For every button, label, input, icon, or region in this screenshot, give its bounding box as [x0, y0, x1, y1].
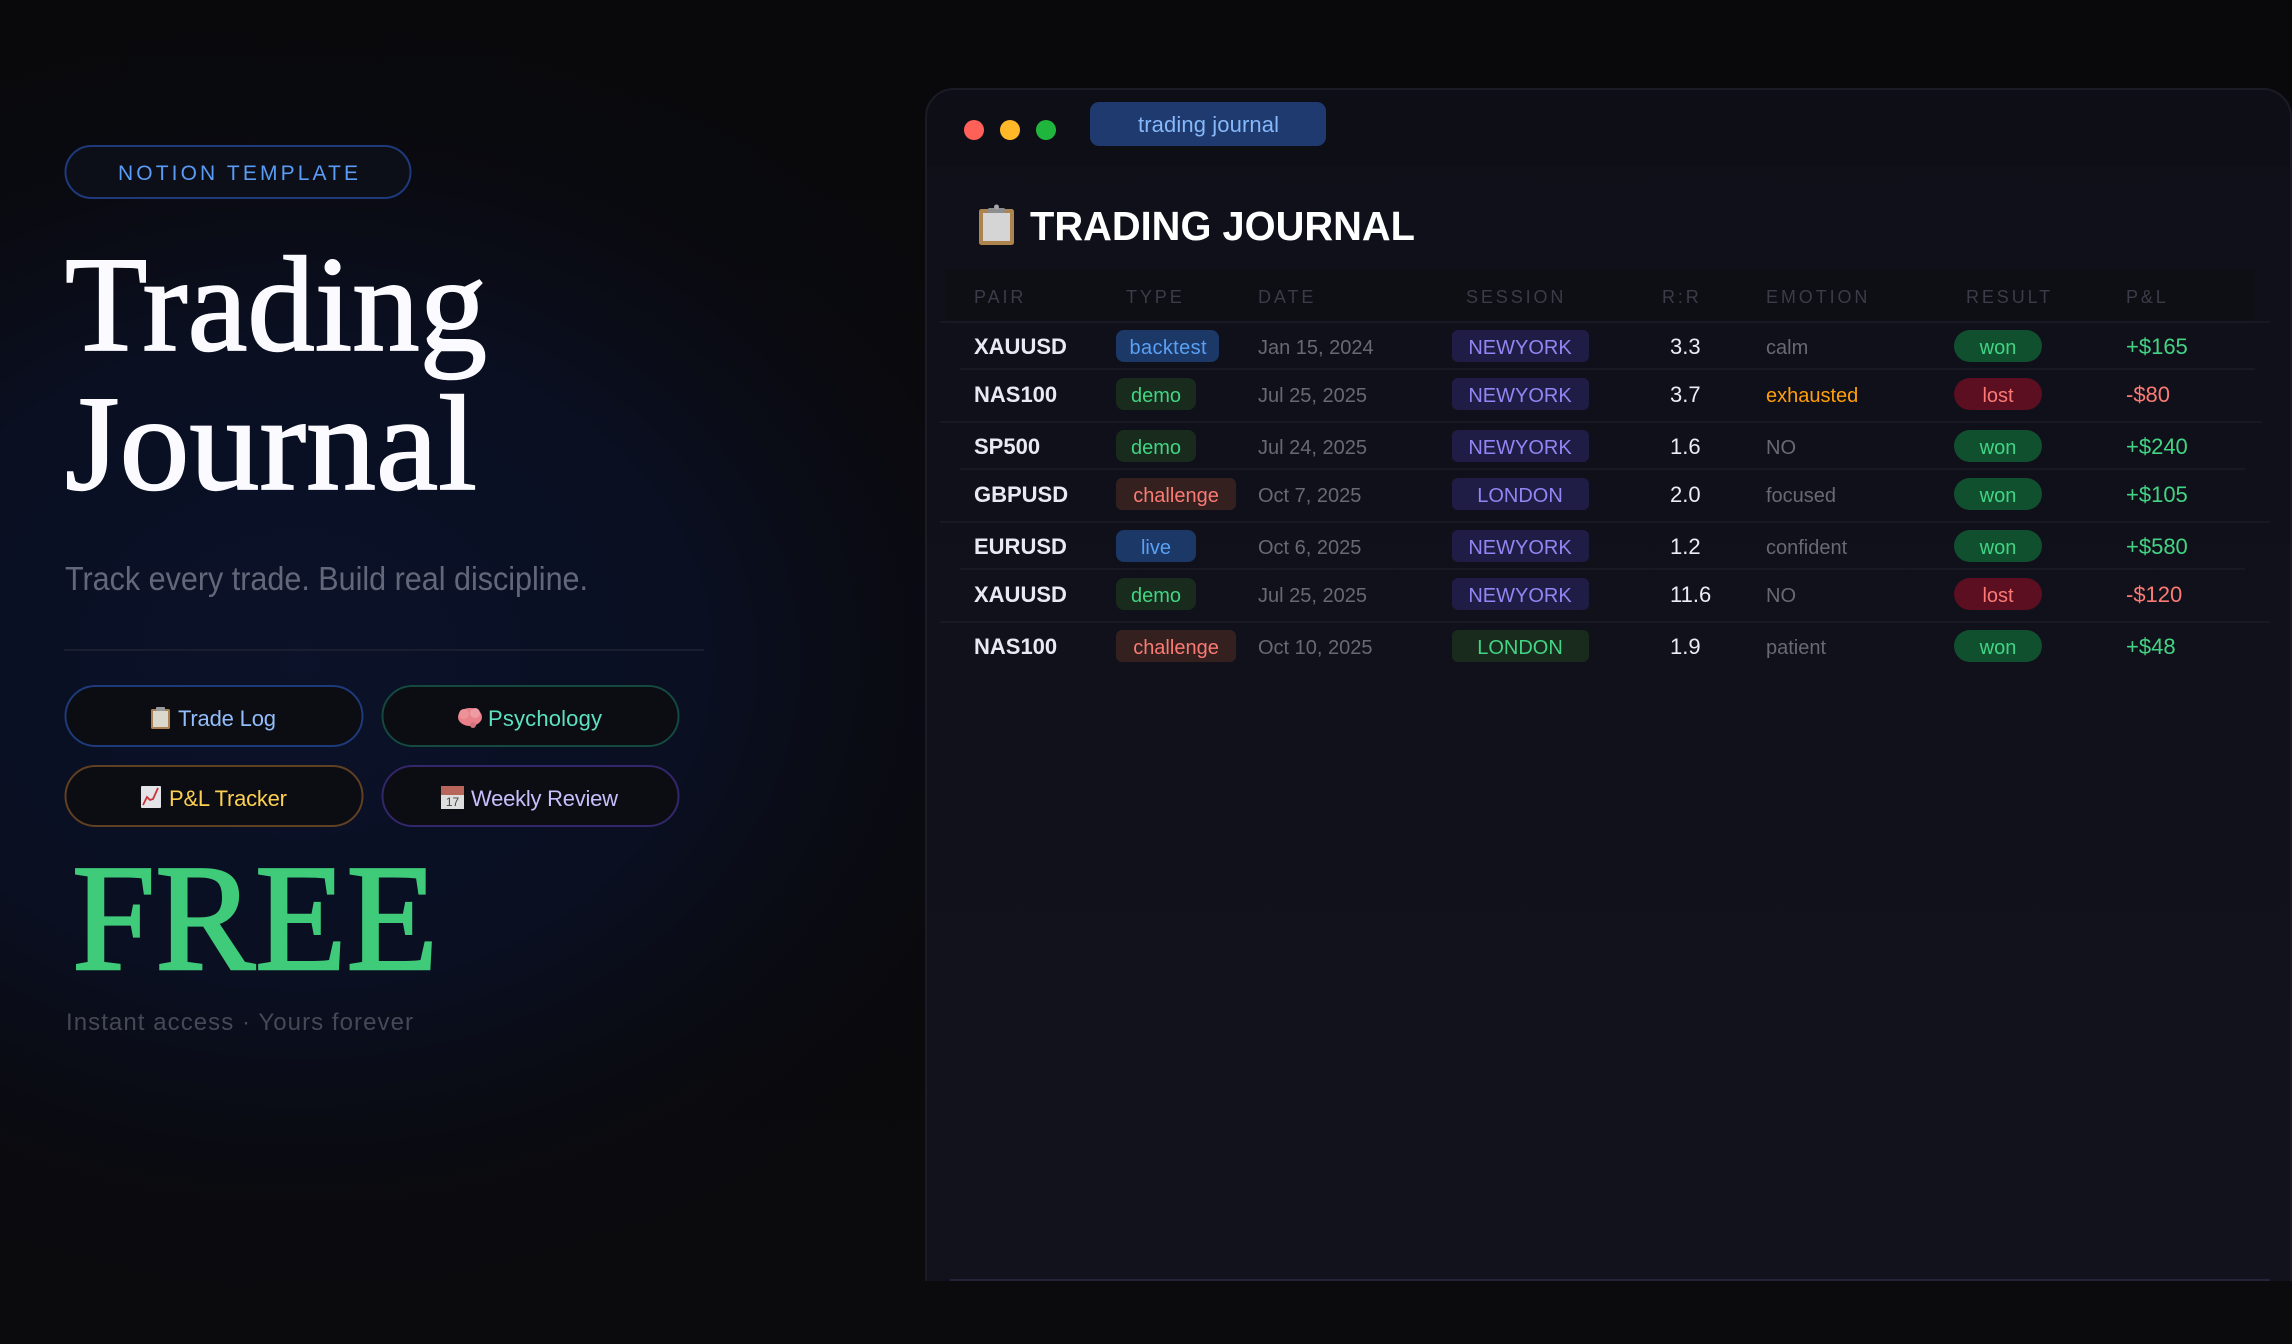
row 6: Jul 25, 2025 — [1258, 585, 1367, 607]
row 1: XAUUSD — [974, 334, 1067, 359]
row 6: lost — [1982, 585, 2014, 607]
badge: notion template: NOTION TEMPLATE — [118, 162, 358, 185]
row 7 — [974, 630, 2176, 662]
badge: notion template — [66, 146, 410, 198]
table heading: TRADING JOURNAL — [1030, 203, 1415, 249]
bottom edge — [950, 1279, 2270, 1281]
row 3: Jul 24, 2025 — [1258, 437, 1367, 459]
row 3: SP500 — [974, 434, 1040, 459]
row 1: 3.3 — [1670, 334, 1701, 359]
panel: app window — [926, 89, 2291, 1281]
row 2 — [974, 378, 2170, 410]
row 7: LONDON — [1477, 637, 1563, 659]
row 6: XAUUSD — [974, 582, 1067, 607]
feature pill: trade log: Trade Log — [178, 706, 276, 731]
feature pill: trade log — [66, 686, 362, 746]
title: Journal — [65, 369, 477, 519]
table header: PAIR — [974, 287, 1026, 307]
row 5 — [974, 530, 2188, 562]
divider — [64, 649, 704, 651]
row 1: +$165 — [2126, 334, 2188, 359]
table header: SESSION — [1466, 287, 1566, 307]
row 3: NEWYORK — [1468, 437, 1572, 459]
row 4: Oct 7, 2025 — [1258, 485, 1361, 507]
row 2: demo — [1131, 385, 1181, 407]
table header — [946, 270, 2255, 322]
row 4 — [974, 478, 2188, 510]
row 5: EURUSD — [974, 534, 1067, 559]
tab: trading journal — [1138, 112, 1279, 137]
feature pill: p&l tracker — [66, 766, 362, 826]
row 3 — [974, 430, 2188, 462]
row 1 — [974, 330, 2188, 362]
title bar — [926, 89, 2291, 167]
icon: brain — [458, 708, 482, 728]
row 4: GBPUSD — [974, 482, 1068, 507]
row 7: challenge — [1133, 637, 1219, 659]
row 7: NAS100 — [974, 634, 1057, 659]
feature pill: psychology — [382, 686, 678, 746]
row 4: +$105 — [2126, 482, 2188, 507]
row 7: +$48 — [2126, 634, 2176, 659]
row 2: Jul 25, 2025 — [1258, 385, 1367, 407]
table header: P&L — [2126, 287, 2169, 307]
table: trades — [940, 270, 2270, 662]
panel: left hero column — [64, 146, 704, 1036]
row 3: NO — [1766, 437, 1796, 459]
row 6: NEWYORK — [1468, 585, 1572, 607]
row 1: calm — [1766, 337, 1808, 359]
row 7: 1.9 — [1670, 634, 1701, 659]
subtitle: Track every trade. Build real discipline. — [65, 560, 588, 597]
row 4: 2.0 — [1670, 482, 1701, 507]
row 3: 1.6 — [1670, 434, 1701, 459]
row 2: NEWYORK — [1468, 385, 1572, 407]
row 5: +$580 — [2126, 534, 2188, 559]
row 4: challenge — [1133, 485, 1219, 507]
row 1: backtest — [1130, 337, 1207, 359]
row 7: won — [1979, 637, 2016, 659]
row 7: Oct 10, 2025 — [1258, 637, 1373, 659]
tab — [1090, 102, 1326, 146]
row 5: 1.2 — [1670, 534, 1701, 559]
feature pill: weekly review: Weekly Review — [471, 786, 618, 811]
note: Instant access · Yours forever — [66, 1009, 413, 1036]
row 7: patient — [1766, 637, 1826, 659]
row 2: exhausted — [1766, 385, 1858, 407]
row 2: NAS100 — [974, 382, 1057, 407]
table header: DATE — [1258, 287, 1316, 307]
free price: FREE — [72, 834, 438, 1002]
title: Trading — [65, 230, 487, 380]
row 3: demo — [1131, 437, 1181, 459]
row 6 — [974, 578, 2182, 610]
table header: TYPE — [1126, 287, 1185, 307]
row 5: live — [1141, 537, 1171, 559]
window frame — [926, 89, 2291, 1281]
row 2: 3.7 — [1670, 382, 1701, 407]
row 6: demo — [1131, 585, 1181, 607]
row 5: Oct 6, 2025 — [1258, 537, 1361, 559]
title — [65, 230, 487, 519]
feature pill: p&l tracker: P&L Tracker — [169, 786, 287, 811]
icon: calendar: 17 — [446, 795, 459, 809]
icon: clipboard — [979, 204, 1014, 245]
row 5: confident — [1766, 537, 1848, 559]
feature pill: weekly review — [382, 766, 678, 826]
table header: EMOTION — [1766, 287, 1870, 307]
row 3: +$240 — [2126, 434, 2188, 459]
row 4: focused — [1766, 485, 1836, 507]
row 5: NEWYORK — [1468, 537, 1572, 559]
icon: calendar — [441, 786, 464, 809]
icon: chart — [141, 786, 161, 808]
icon: clipboard — [151, 707, 170, 729]
row 1: won — [1979, 337, 2016, 359]
row 2: -$80 — [2126, 382, 2170, 407]
table header: RESULT — [1966, 287, 2053, 307]
row 6: NO — [1766, 585, 1796, 607]
row 4: won — [1979, 485, 2016, 507]
row 3: won — [1979, 437, 2016, 459]
row 5: won — [1979, 537, 2016, 559]
feature pill: psychology: Psychology — [488, 706, 602, 731]
row 1: Jan 15, 2024 — [1258, 337, 1374, 359]
row 1: NEWYORK — [1468, 337, 1572, 359]
table header: R:R — [1662, 287, 1702, 307]
row 6: 11.6 — [1670, 582, 1711, 607]
row 6: -$120 — [2126, 582, 2182, 607]
row 4: LONDON — [1477, 485, 1563, 507]
row 2: lost — [1982, 385, 2014, 407]
